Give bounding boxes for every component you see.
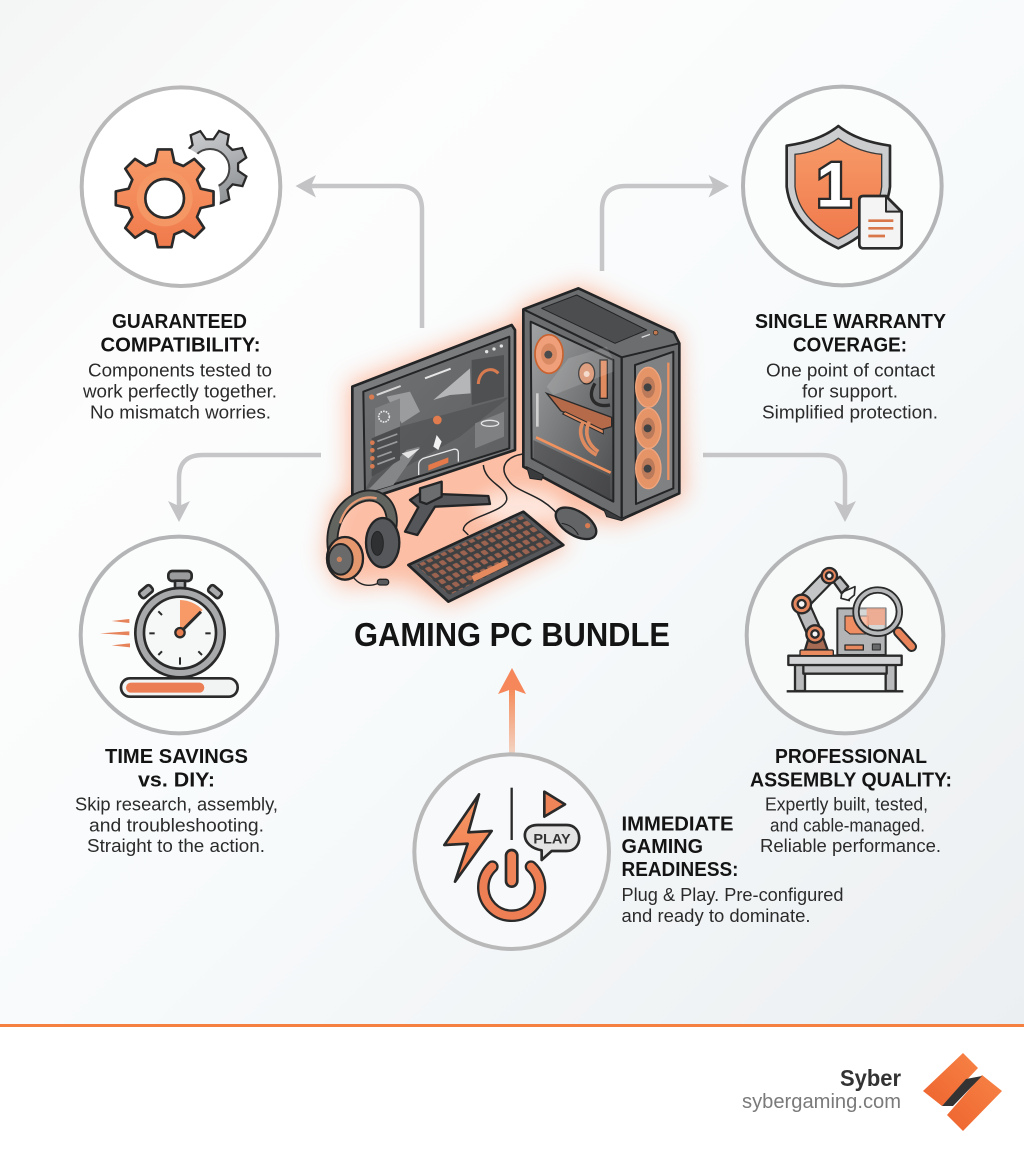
description: Straight to the action. — [87, 836, 265, 856]
panel: guaranteed compatibility — [82, 87, 280, 422]
website: sybergaming.com — [742, 1091, 901, 1113]
footer — [0, 1024, 1024, 1154]
heading — [105, 745, 248, 792]
description — [762, 360, 938, 422]
arrow: to professional assembly — [703, 455, 856, 522]
description: and cable-managed. — [770, 816, 925, 836]
description: Simplified protection. — [762, 402, 938, 422]
heading: PROFESSIONAL — [775, 745, 927, 768]
heading — [750, 745, 952, 792]
heading: IMMEDIATE — [622, 812, 734, 836]
description — [82, 360, 277, 422]
heading — [100, 310, 260, 356]
arrow: to single warranty coverage — [602, 175, 729, 271]
description: for support. — [802, 382, 898, 402]
heading: READINESS: — [622, 858, 738, 881]
logo — [923, 1053, 1002, 1131]
arrow: to time savings — [168, 455, 321, 522]
arrow: readiness to bundle — [498, 668, 526, 755]
tower interior — [533, 330, 668, 500]
monitor stand — [405, 482, 490, 535]
icon: gears — [82, 87, 280, 286]
description: work perfectly together. — [82, 382, 277, 402]
icon: stopwatch — [81, 537, 277, 733]
panel: single warranty coverage — [743, 87, 946, 423]
heading: TIME SAVINGS — [105, 745, 248, 768]
heading: ASSEMBLY QUALITY: — [750, 768, 952, 792]
description: No mismatch worries. — [90, 402, 271, 422]
description — [622, 885, 844, 926]
heading — [755, 310, 946, 356]
icon: lightning, power and play — [414, 754, 609, 949]
heading: vs. DIY: — [138, 768, 215, 792]
description: Skip research, assembly, — [75, 794, 278, 814]
mouse — [550, 501, 602, 546]
description — [75, 794, 278, 856]
description: Expertly built, tested, — [765, 794, 928, 814]
orange glow — [323, 285, 685, 605]
description: and troubleshooting. — [89, 816, 264, 836]
monitor — [352, 325, 515, 503]
heading: COVERAGE: — [793, 334, 907, 356]
tower case — [523, 288, 679, 521]
description: Plug & Play. Pre-configured — [622, 885, 844, 905]
heading: SINGLE WARRANTY — [755, 310, 946, 333]
description: One point of contact — [766, 360, 935, 380]
panel: immediate gaming readiness — [414, 754, 844, 949]
panel: professional assembly quality — [747, 537, 952, 856]
heading: GUARANTEED — [112, 310, 247, 333]
brand name: Syber — [840, 1065, 901, 1091]
heading: GAMING — [622, 835, 703, 858]
arrow: to guaranteed compatibility — [296, 175, 422, 328]
central illustration: gaming PC — [323, 285, 685, 605]
icon: robot arm and magnifier — [747, 537, 943, 733]
description — [760, 794, 941, 856]
title: GAMING PC BUNDLE — [354, 617, 670, 654]
keyboard — [408, 512, 563, 602]
panel: time savings vs DIY — [75, 537, 278, 856]
description: and ready to dominate. — [622, 906, 810, 926]
headset — [327, 496, 399, 585]
heading — [622, 812, 738, 881]
icon: lightning, power and play: PLAY — [533, 830, 571, 846]
description: Components tested to — [88, 360, 272, 380]
icon: shield with document: 1 — [816, 151, 852, 221]
icon: shield with document — [743, 87, 942, 285]
cables — [463, 454, 557, 535]
heading: COMPATIBILITY: — [100, 334, 260, 356]
description: Reliable performance. — [760, 836, 941, 856]
